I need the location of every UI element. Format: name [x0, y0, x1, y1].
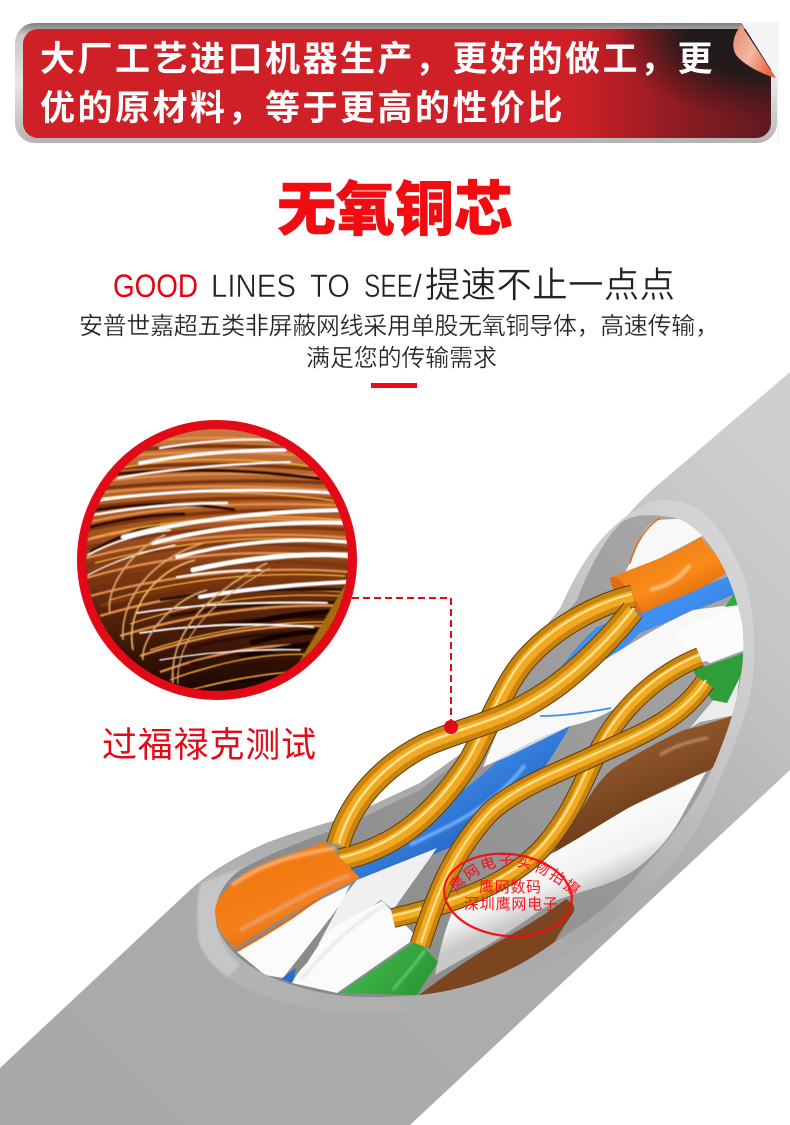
white wire centre shade: [300, 905, 385, 980]
copper strands: twist two: [392, 655, 706, 945]
copper wires: gold strands: [90, 459, 348, 690]
copper wires: lower-right gold corner: [298, 582, 346, 663]
white wire with blue stripe: [483, 603, 745, 767]
stamp: 深圳鹰网电子: [464, 893, 558, 914]
brown wire: [553, 712, 745, 853]
stamp: 鹰网数码: [479, 876, 541, 897]
blue wire highlight: [410, 765, 525, 845]
white wire centre: [292, 901, 417, 993]
copper wires: dark strands: [86, 470, 350, 676]
magnified copper circle: [82, 424, 360, 696]
green wire highlight: [393, 950, 425, 990]
banner line 1: 大厂工艺进口机器生产，更好的做工，更: [40, 31, 715, 82]
red divider bar: [371, 383, 417, 388]
copper wires: curled arcs: [109, 535, 270, 684]
description text: [79, 306, 719, 373]
orange stripe: [237, 895, 322, 951]
copper wires: mid-brown strands: [86, 446, 350, 606]
blue sliver: [281, 968, 296, 983]
blue wire: [340, 570, 745, 880]
stamp: [443, 852, 581, 938]
brown wire bottom: [418, 899, 574, 996]
orange wire bottom: [215, 842, 360, 948]
title: 无氧铜芯: [277, 162, 513, 247]
cable tube body: [0, 372, 790, 1125]
subtitle: /: [413, 268, 422, 304]
copper wires: orange strands: [86, 438, 350, 672]
subtitle: GOOD: [113, 268, 198, 304]
description text: 安普世嘉超五类非屏蔽网线采用单股无氧铜导体，高速传输，: [79, 306, 719, 341]
white wire left: [237, 885, 350, 978]
cable illustration: [0, 372, 790, 1125]
green wire bottom: [340, 940, 438, 995]
tube interior: [216, 515, 743, 997]
orange wire top highlight: [650, 565, 690, 590]
callout dashed leader line: [352, 598, 451, 720]
green wire: upper small: [725, 594, 738, 607]
subtitle: 提速不止一点点: [425, 257, 675, 308]
subtitle: SEE: [364, 268, 413, 304]
orange cut end: [610, 577, 643, 613]
tube opening rim: [198, 500, 754, 1012]
callout dot: [444, 720, 458, 734]
white wire shadow: [483, 726, 570, 767]
copper wires: white highlights: [88, 440, 348, 660]
tube left rim light: [197, 865, 250, 977]
stamp: 鹰网电子实物拍摄: [449, 854, 581, 896]
description text: 满足您的传输需求: [306, 338, 497, 373]
banner line 2: 优的原材料，等于更高的性价比: [40, 80, 565, 131]
orange stripe: top: [630, 518, 660, 563]
header banner: [15, 22, 779, 143]
orange wire top: [610, 537, 730, 613]
white wire behind: [318, 848, 437, 945]
white wire below green: [690, 679, 739, 728]
subtitle: TO: [310, 268, 350, 304]
green wire: upper: [693, 652, 746, 703]
white sleeve: [706, 606, 744, 663]
brown wire highlight: [660, 738, 708, 755]
subtitle: [113, 257, 675, 308]
subtitle: LINES: [211, 268, 296, 304]
copper strands: twist one: [338, 594, 634, 860]
callout label: 过福禄克测试: [102, 717, 316, 768]
blue stripe: [540, 708, 611, 716]
icon: page curl: [733, 25, 776, 78]
white wire bottom right: [435, 770, 707, 975]
copper wires: near-black strands: [205, 612, 350, 686]
white wire: top: [625, 518, 702, 572]
